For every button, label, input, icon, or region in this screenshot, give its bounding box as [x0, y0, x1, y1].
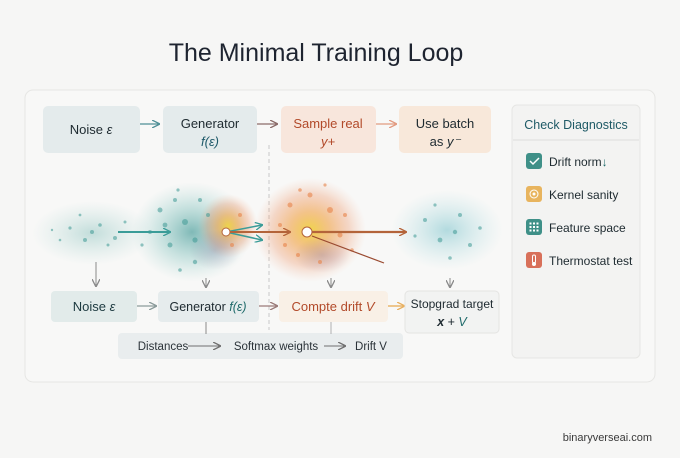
box: use batch: [399, 106, 491, 153]
cloud: noise: [32, 201, 152, 265]
item: drift norm: Drift norm↓: [549, 155, 608, 169]
cloud: generator: [132, 182, 258, 282]
arrows: generator fan: [226, 225, 262, 240]
arrow: [388, 305, 404, 307]
arrow: [259, 305, 277, 307]
arrow: sample to batch: [376, 123, 396, 125]
box: generator bottom: Generator f(ε): [169, 300, 247, 314]
sub-box: drift computation: Drift V: [355, 341, 387, 353]
arrow: real to batch: [308, 231, 406, 233]
box: compute drift: [279, 291, 388, 322]
item: feature space: Feature space: [549, 221, 626, 235]
sub-box: drift computation: [118, 333, 403, 359]
sub-box: drift computation: Softmax weights: [234, 341, 318, 353]
top flow row: [43, 106, 491, 153]
scatter visualization: [32, 178, 503, 282]
box: noise: Noise ε: [70, 122, 113, 137]
item: thermostat test: Thermostat test: [549, 254, 633, 268]
box: use batch: as y⁻: [430, 134, 461, 149]
box: compute drift: Compte drift V: [291, 299, 376, 314]
panel: check diagnostics: [512, 105, 640, 358]
box: generator bottom: [158, 291, 259, 322]
item: drift norm: [526, 153, 608, 169]
outer panel: [25, 90, 655, 382]
box: generator: f(ε): [201, 134, 219, 149]
box: noise: [43, 106, 140, 153]
arrow: real diagonal: [312, 236, 384, 263]
arrow: noise to generator: [140, 123, 159, 125]
box: stopgrad: [405, 291, 499, 333]
item: thermostat test: [526, 252, 633, 268]
box: stopgrad: Stopgrad target: [411, 297, 494, 311]
heading: Check Diagnostics: [524, 118, 628, 132]
box: stopgrad: x + V: [436, 315, 468, 329]
point: generator: [222, 228, 230, 236]
cloud: real samples: [254, 178, 366, 282]
item: kernel sanity: [526, 186, 618, 202]
box: noise bottom: Noise ε: [73, 299, 116, 314]
cloud: batch: [391, 190, 503, 270]
down arrows: [96, 262, 450, 287]
box: generator: Generator: [181, 116, 240, 131]
arrow: [137, 305, 156, 307]
box: noise bottom: [51, 291, 137, 322]
dashed divider: [268, 145, 270, 330]
box: sample real: Sample real: [293, 116, 363, 131]
item: kernel sanity: Kernel sanity: [549, 188, 618, 202]
box: generator: [163, 106, 257, 153]
item: feature space: [526, 219, 626, 235]
box: use batch: Use batch: [416, 116, 474, 131]
arrow: generator to sample: [257, 123, 277, 125]
dots: [51, 188, 482, 272]
box: sample real: y+: [320, 134, 335, 149]
arrow: generator to real: [226, 231, 290, 233]
title: The Minimal Training Loop: [169, 39, 463, 67]
point: real: [302, 227, 312, 237]
arrow: noise to generator cloud: [118, 231, 170, 233]
footer credit: binaryverseai.com: [563, 432, 652, 444]
bottom flow row: [51, 291, 499, 359]
box: sample real: [281, 106, 376, 153]
sub-box: drift computation: Distances: [138, 341, 188, 353]
